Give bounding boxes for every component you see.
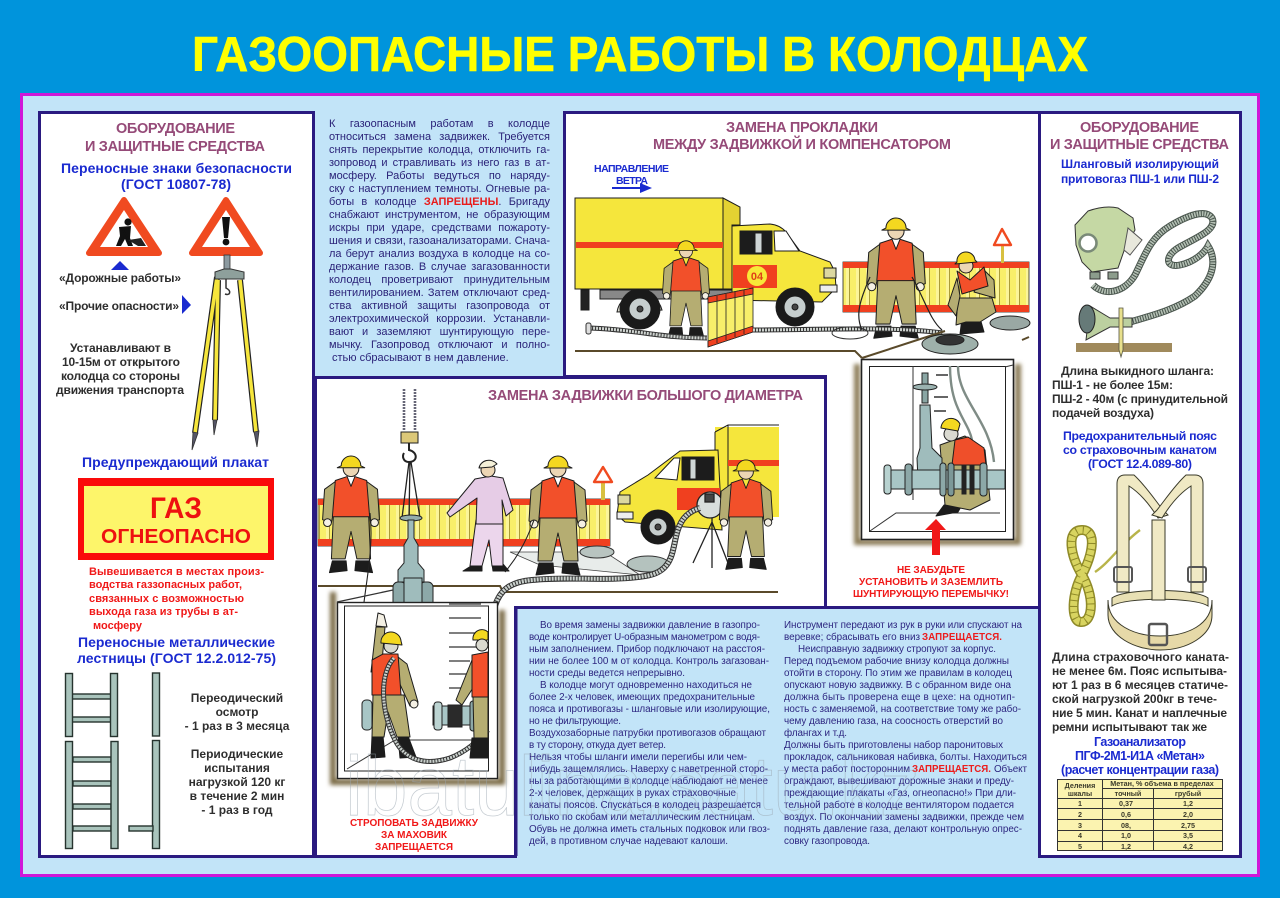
table: gas concentration: 2: [1078, 810, 1082, 819]
subheading: safety belt: Предохранительный пояс: [1063, 429, 1217, 443]
text block: rules left column: только по скобам или металлическим лестницам.: [529, 812, 755, 823]
subheading: ladders: Переносные металлические: [78, 634, 275, 650]
subheading: ladders: лестницы (ГОСТ 12.2.012-75): [77, 650, 276, 666]
table: gas concentration: шкалы: [1068, 789, 1092, 798]
heading: large valve replacement: ЗАМЕНА ЗАДВИЖКИ БОЛЬШОГО ДИАМЕТРА: [488, 388, 804, 404]
icon: sign tripod: [192, 255, 259, 450]
note: rope and belt tests: не менее 6м. Пояс испытыва-: [1052, 664, 1227, 678]
text block: rules right column: опускают новую задвижку. В с обранном виде она: [784, 680, 1012, 691]
text block: rules right column: поднять давление газа, делают контрольную опрес-: [784, 824, 1022, 835]
warning: shunt jumper: УСТАНОВИТЬ И ЗАЗЕМЛИТЬ: [859, 577, 1003, 588]
subheading: portable signs: [61, 160, 292, 192]
illustration: crane hook and valve: [393, 389, 433, 608]
warning: valve sling: ЗА МАХОВИК: [381, 830, 448, 841]
text block: rules left column: 2-х человек, держащих в руках страховочные: [529, 788, 736, 799]
text block: rules right column: [784, 620, 1027, 847]
text block: rules left column: ны за работающими в колодце наблюдают не менее: [529, 776, 768, 787]
note: inspection intervals: - 1 раз в год: [201, 803, 273, 817]
text block: introduction: мычку. Газопровод отключают и полно-: [329, 339, 550, 351]
heading: equipment: И ЗАЩИТНЫЕ СРЕДСТВА: [1050, 137, 1230, 153]
table: gas concentration: Деления: [1065, 781, 1095, 790]
illustration: hose gas mask: [1075, 207, 1213, 357]
well worker: [936, 418, 990, 516]
text block: rules left column: канаты поясов. Спускаться в колодец разрешается: [529, 800, 761, 811]
text block: introduction: относиться замена задвижек. Требуется: [329, 131, 550, 143]
subheading: portable signs: (ГОСТ 10807-78): [121, 176, 231, 192]
label: road works: «Дорожные работы»: [59, 271, 181, 285]
illustration: workers above well: [323, 456, 587, 575]
note: rope and belt tests: [1052, 650, 1229, 734]
note: rope and belt tests: ние 5 мин. Канат и наплечные: [1052, 706, 1227, 720]
note: inspection intervals: Периодические: [191, 747, 284, 761]
text block: introduction: снять перекрытие колодца, отключить га-: [329, 144, 550, 156]
note: placement: движения транспорта: [56, 383, 184, 397]
warning poster: ГАЗ: [150, 492, 202, 525]
subheading: gas analyzer: (расчет концентрации газа): [1061, 763, 1219, 777]
note: hose length: ПШ-2 - 40м (с принудительной: [1052, 392, 1228, 406]
table: gas concentration: 1,2: [1121, 842, 1131, 851]
illustration: service truck: 04: [751, 271, 764, 283]
illustration: small portable fence: [708, 288, 753, 347]
warning: valve sling: [350, 818, 479, 853]
pipe in well: [362, 700, 488, 731]
text block: rules right column: Неисправную задвижку стропуют за корпус.: [798, 644, 996, 655]
note: hose length: [1052, 364, 1228, 420]
text block: introduction: [329, 118, 551, 368]
label: other hazards: «Прочие опасности»: [59, 299, 179, 313]
illustration: workers above ground: [663, 218, 996, 338]
note: hose length: подачей воздуха): [1052, 406, 1154, 420]
note: inspection intervals: в течение 2 мин: [190, 789, 284, 803]
wind direction label: НАПРАВЛЕНИЕ: [594, 163, 669, 175]
table: gas concentration: 1: [1078, 799, 1082, 808]
illustration: ground line: [575, 331, 1029, 358]
heading: equipment: [1050, 120, 1230, 153]
text block: introduction: зопровод и стравливать из него газ в ат-: [329, 157, 550, 169]
panel: safety rules text: [516, 608, 1040, 856]
note: rope and belt tests: ремни испытывают так же: [1052, 720, 1207, 734]
note: inspection intervals: осмотр: [216, 705, 258, 719]
wind direction label: [594, 163, 669, 193]
note: inspection intervals: Переодический: [191, 691, 283, 705]
text block: rules left column: Во время замены задвижки давление в газопро-: [540, 620, 760, 631]
wind direction label: ВЕТРА: [616, 175, 648, 187]
note: placement: 10-15м от открытого: [62, 355, 180, 369]
table: gas concentration: 1,0: [1121, 831, 1131, 840]
text block: rules left column: нии не более 100 м от колодца. Контроль загазован-: [529, 656, 769, 667]
text block: rules left column: дей, в противном случае надевают калоши.: [529, 836, 728, 847]
subheading: safety belt: со страховочным канатом: [1063, 443, 1217, 457]
text block: rules right column: у места работ посторонним: [784, 764, 910, 775]
text block: rules right column: совку газопровода.: [784, 836, 870, 847]
text block: introduction: электрохимической коррозии. Устанавли-: [329, 313, 550, 325]
text block: rules left column: Обувь не должна иметь стальных подковок или гвоз-: [529, 824, 770, 835]
table: gas concentration: 4,2: [1183, 842, 1193, 851]
text block: rules right column: Перед подъемом рабочие внизу колодца должны: [784, 656, 1009, 667]
text block: introduction: ства активной защиты газопровода от: [329, 300, 550, 312]
table: gas concentration: 0,6: [1121, 810, 1131, 819]
warning poster: [78, 478, 274, 560]
panel: left equipment: [40, 112, 314, 856]
text block: rules left column: нибудь защемлялись. Наверху с наветренной сторо-: [529, 764, 768, 775]
heading: gasket replacement: [653, 120, 951, 153]
warning: shunt jumper: НЕ ЗАБУДЬТЕ: [897, 565, 965, 576]
arrow: attention to jumper: [925, 519, 946, 555]
text block: introduction: снабжают инструментом, не образующим: [329, 209, 550, 221]
table: gas concentration: 2,75: [1181, 821, 1195, 830]
text block: rules right column: веревке; сбрасывать его вниз: [784, 632, 920, 643]
text block: introduction: искры при ударе, средствами пожароту-: [329, 222, 550, 234]
panel: gasket replacement: [564, 112, 1040, 608]
table: gas concentration: 2,0: [1183, 810, 1193, 819]
illustration: air hose: [586, 277, 943, 339]
table: gas concentration: [1058, 779, 1223, 851]
subheading: gas analyzer: [1061, 735, 1219, 777]
text block: rules left column: [529, 620, 770, 847]
text block: rules right column: чему давлению газа, на соосность отверстий во: [784, 716, 1004, 727]
note: poster placement: связанных с возможностью: [89, 593, 244, 605]
note: placement: Устанавливают в: [70, 341, 171, 355]
note: inspection intervals: испытания: [204, 761, 270, 775]
table: gas concentration: 08,: [1121, 821, 1131, 830]
table: gas concentration: 0,37: [1119, 799, 1133, 808]
text block: rules left column: пояса и противогазы - шланговые или изолирующие,: [529, 704, 770, 715]
text block: introduction: шения и связи, газоанализаторами. Снача-: [329, 235, 550, 247]
table: gas concentration: Метан, % объема в пределах: [1110, 779, 1214, 788]
note: inspection intervals: - 1 раз в 3 месяца: [185, 719, 290, 733]
text block: introduction: ску с наступлением темноты. Огневые ра-: [329, 183, 550, 195]
warning poster: ОГНЕОПАСНО: [101, 525, 251, 548]
note: rope and belt tests: ют 1 раз в 6 месяцев статиче-: [1052, 678, 1228, 692]
text block: introduction: вают и заземляют шунтирующую пере-: [329, 326, 550, 338]
text block: rules right column: Объект: [994, 764, 1027, 775]
text block: rules right column: отойти в сторону. По этим же правилам в колодец: [784, 668, 1012, 679]
table: gas concentration: 1,2: [1183, 799, 1193, 808]
icon: small warning sign: [994, 229, 1011, 263]
partially visible worker: [456, 630, 488, 758]
text block: introduction: К газоопасным работам в колодце: [329, 118, 550, 130]
text block: rules right column: флангах и т.д.: [784, 728, 847, 739]
illustration: fence: [318, 499, 610, 546]
text block: rules right column: Должны быть приготовлены набор паронитовых: [784, 740, 1003, 751]
kneeling worker: [948, 252, 996, 334]
watermark: ibatulina.satu.kz: [345, 739, 920, 833]
text block: rules right column: должна быть проверена еще в цехе: на однотип-: [784, 692, 1015, 703]
text block: rules right column: преждающие плакаты «Газ, огнеопасно!» При дли-: [784, 788, 1016, 799]
text block: rules right column: воздух. По окончании замены задвижки, прежде чем: [784, 812, 1024, 823]
note: placement: [56, 341, 184, 397]
warning: shunt jumper: [853, 565, 1009, 600]
note: rope and belt tests: ской нагрузкой 200кг в тече-: [1052, 692, 1217, 706]
text block: rules right column: прокладок, сальниковая набивка, болты. Находиться: [784, 752, 1027, 763]
subheading: gas analyzer: ПГФ-2М1-И1А «Метан»: [1075, 749, 1205, 763]
text block: rules left column: Нельзя чтобы шланги имели перегибы или чем-: [529, 752, 747, 763]
subheading: ladders: [77, 634, 276, 666]
subheading: safety belt: [1063, 429, 1217, 471]
subheading: safety belt: (ГОСТ 12.4.089-80): [1088, 457, 1192, 471]
text block: introduction: стью сбрасывают в нем давление.: [332, 352, 509, 364]
warning: valve sling: ЗАПРЕЩАЕТСЯ: [375, 842, 453, 853]
text block: rules right column: ЗАПРЕЩАЕТСЯ.: [922, 632, 1002, 643]
text block: introduction: ла берут анализ воздуха в колодце на со-: [329, 248, 550, 260]
heading: equipment: ОБОРУДОВАНИЕ: [116, 121, 235, 137]
table: gas concentration: 5: [1078, 842, 1082, 851]
illustration: well with worker: [857, 360, 1018, 542]
text block: rules left column: ности среды ведется непрерывно.: [529, 668, 685, 679]
icon: blue pointer up: [111, 261, 129, 270]
engineer: [447, 460, 513, 571]
table: gas concentration: 4: [1078, 831, 1082, 840]
text block: rules right column: Инструмент передают из рук в руки или спускают на: [784, 620, 1022, 631]
note: poster placement: выхода газа из трубы в ат-: [89, 606, 238, 618]
subheading: portable signs: Переносные знаки безопасности: [61, 160, 292, 176]
table: gas concentration: грубый: [1175, 789, 1201, 798]
note: poster placement: [89, 566, 264, 632]
heading: equipment: И ЗАЩИТНЫЕ СРЕДСТВА: [85, 139, 266, 155]
text block: introduction: вентилированием. Затем отключают сред-: [329, 287, 550, 299]
illustration: manhole: [922, 316, 1030, 354]
icon: road works sign: [89, 200, 159, 253]
note: rope and belt tests: Длина страховочного каната-: [1052, 650, 1229, 664]
icon: blue pointer right: [182, 295, 191, 314]
subheading: hose gas mask: Шланговый изолирующий: [1061, 157, 1219, 171]
text block: introduction: боты в колодце ЗАПРЕЩЕНЫ. Бригаду: [329, 196, 550, 208]
text block: rules left column: ным заполнением. Прибор подключают на расстоя-: [529, 644, 765, 655]
worker with raised arm: [371, 613, 418, 758]
table: gas concentration: точный: [1115, 789, 1141, 798]
heading: gasket replacement: МЕЖДУ ЗАДВИЖКОЙ И КОМПЕНСАТОРОМ: [653, 135, 951, 153]
illustration: service truck: [575, 198, 837, 329]
heading: gasket replacement: ЗАМЕНА ПРОКЛАДКИ: [726, 120, 878, 136]
note: hose length: ПШ-1 - не более 15м:: [1052, 378, 1173, 392]
note: placement: колодца со стороны: [61, 369, 180, 383]
icon: small warning sign: [594, 467, 612, 500]
subheading: hose gas mask: притовогаз ПШ-1 или ПШ-2: [1061, 172, 1219, 186]
note: poster placement: водства газзопасных работ,: [89, 579, 242, 591]
table: gas concentration: 3: [1078, 821, 1082, 830]
table: gas concentration: 3,5: [1183, 831, 1193, 840]
pipe and valve: [884, 373, 1005, 496]
illustration: blower on tripod: [693, 492, 728, 568]
heading: equipment: [85, 121, 266, 155]
text block: introduction: держание газов. В случае загазованности: [329, 261, 550, 273]
warning: shunt jumper: ШУНТИРУЮЩУЮ ПЕРЕМЫЧКУ!: [853, 589, 1009, 600]
text block: rules left column: В колодце могут одновременно находиться не: [540, 680, 752, 691]
note: inspection intervals: [185, 691, 290, 817]
warning: valve sling: СТРОПОВАТЬ ЗАДВИЖКУ: [350, 818, 479, 829]
subheading: warning poster: Предупреждающий плакат: [82, 454, 269, 470]
text block: rules left column: но не фильтрующие.: [529, 716, 621, 727]
text block: rules left column: более 2-х человек, имеющих предохранительные: [529, 692, 756, 703]
illustration: worker at blower: [719, 460, 773, 569]
icon: ladders: [66, 673, 160, 848]
note: hose length: Длина выкидного шланга:: [1061, 364, 1214, 378]
illustration: service truck rear view: [617, 425, 779, 544]
subheading: hose gas mask: [1061, 157, 1219, 186]
note: inspection intervals: нагрузкой 120 кг: [189, 775, 285, 789]
text block: rules left column: Воздухозаборные патрубки противогазов обращают: [529, 728, 766, 739]
text block: introduction: колодец проветривают принудительным: [329, 274, 550, 286]
note: poster placement: мосферу: [93, 620, 143, 632]
illustration: ground and boards: [318, 546, 778, 592]
illustration: well with two workers: [333, 590, 502, 782]
title: ГАЗООПАСНЫЕ РАБОТЫ В КОЛОДЦАХ: [192, 28, 1088, 82]
panel: right equipment: [1040, 112, 1240, 856]
panel: large valve replacement: [316, 378, 826, 856]
text block: rules right column: ЗАПРЕЩАЕТСЯ.: [912, 764, 991, 775]
illustration: air hoses: [362, 508, 700, 640]
text block: rules right column: ограждают, вывешивают дорожные знаки и преду-: [784, 776, 1014, 787]
text block: rules right column: ность с заменяемой, на соответствие тому же рабо-: [784, 704, 1021, 715]
text block: rules left column: воде контролирует U-образным манометром с водя-: [529, 632, 760, 643]
illustration: barrier fence: [843, 262, 1029, 312]
note: poster placement: Вывешивается в местах произ-: [89, 566, 264, 578]
illustration: safety belt with rope: [1071, 475, 1212, 650]
text block: rules left column: в ту сторону, откуда дует ветер.: [529, 740, 666, 751]
heading: equipment: ОБОРУДОВАНИЕ: [1080, 120, 1199, 136]
icon: other hazards sign: [192, 200, 260, 253]
subheading: gas analyzer: Газоанализатор: [1094, 735, 1186, 749]
text block: rules right column: тельной работе в колодце вентилятором подается: [784, 800, 1014, 811]
